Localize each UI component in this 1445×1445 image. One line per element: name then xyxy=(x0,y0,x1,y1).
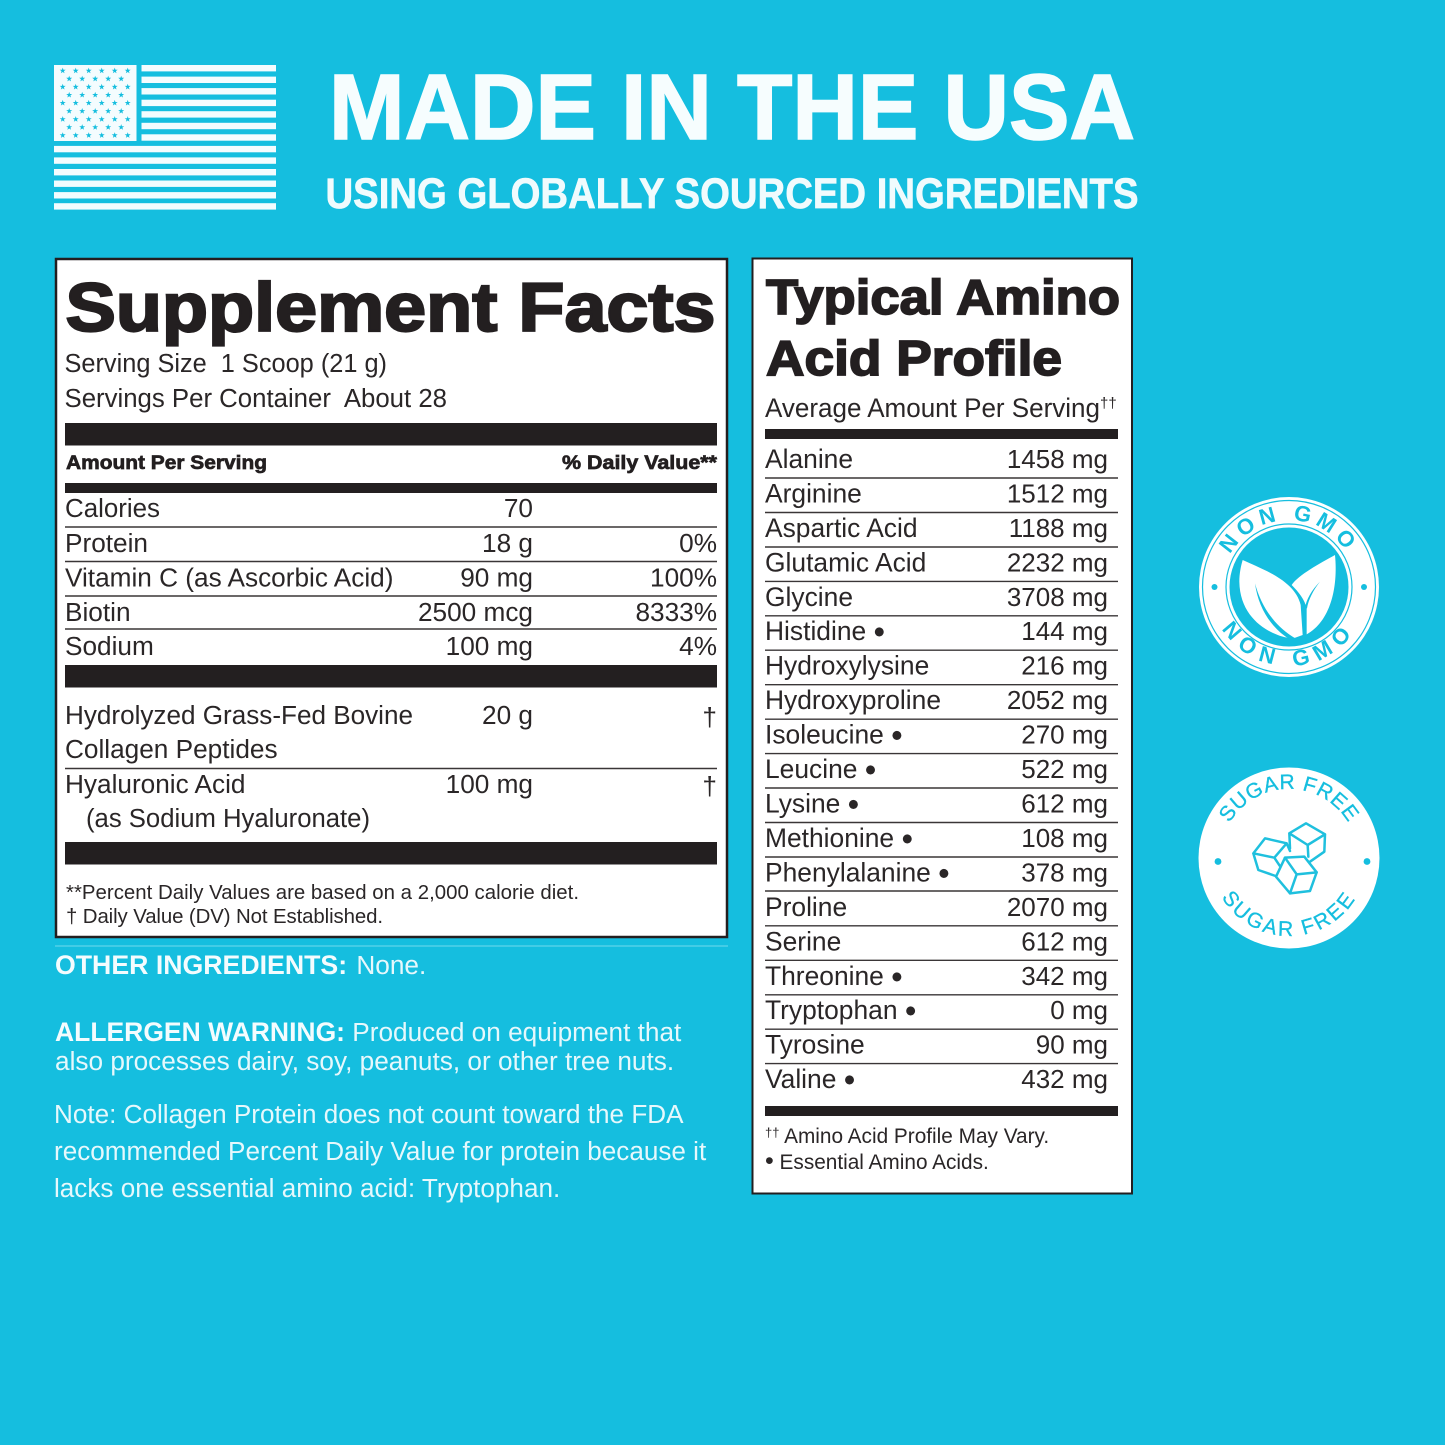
row: hyaluronic acid: 100 mg xyxy=(446,769,533,799)
black bar xyxy=(65,842,717,864)
amino acid rows: • xyxy=(938,854,950,891)
row: hyaluronic acid: (as Sodium Hyaluronate) xyxy=(86,803,370,833)
title: MADE IN THE USA xyxy=(329,55,1135,159)
black bar xyxy=(65,665,717,688)
badge: sugar free xyxy=(1198,768,1380,948)
black bar xyxy=(65,483,717,493)
label: non gmo top: NON GMO xyxy=(1218,506,1354,553)
amino acid rows: Aspartic Acid xyxy=(765,513,918,543)
icon: sugar cubes xyxy=(1253,823,1325,893)
amino acid rows: Valine xyxy=(765,1064,836,1094)
row: hyaluronic acid: † xyxy=(702,771,717,801)
black bar xyxy=(765,1106,1118,1116)
icon: american flag xyxy=(54,65,276,210)
amino acid rows: Threonine xyxy=(765,961,884,991)
black bar xyxy=(65,423,717,446)
row: biotin xyxy=(65,597,717,627)
amino acid rows: 216 mg xyxy=(1021,651,1108,681)
amino acid rows: 378 mg xyxy=(1021,857,1108,887)
amino acid rows: 432 mg xyxy=(1021,1064,1108,1094)
amino acid rows: Hydroxylysine xyxy=(765,651,929,681)
column header: amount per serving: Amount Per Serving xyxy=(66,452,267,474)
text: note: lacks one essential amino acid: Tryptophan. xyxy=(54,1173,560,1203)
row: protein: Protein xyxy=(65,528,148,558)
amino acid rows: Arginine xyxy=(765,478,862,508)
icon: leaves xyxy=(1239,555,1336,639)
amino acid rows: • xyxy=(891,717,903,754)
amino acid rows: 270 mg xyxy=(1021,720,1108,750)
badge: non gmo xyxy=(1199,497,1379,677)
amino acid rows: • xyxy=(874,613,885,650)
footnotes xyxy=(765,1125,1049,1175)
row: protein: 18 g xyxy=(482,528,533,558)
row: collagen peptides: Collagen Peptides xyxy=(65,734,278,764)
amino acid rows: Glycine xyxy=(765,582,853,612)
row: vitamin c: Vitamin C (as Ascorbic Acid) xyxy=(65,562,393,592)
amino acid rows: 612 mg xyxy=(1021,926,1108,956)
heading: typical amino acid profile: Acid Profile xyxy=(766,332,1062,386)
panel: supplement facts xyxy=(56,259,727,937)
amino acid rows: 3708 mg xyxy=(1007,582,1108,612)
label: sugar free top: SUGAR FREE xyxy=(1220,774,1360,822)
subtitle: USING GLOBALLY SOURCED INGREDIENTS xyxy=(326,170,1138,218)
text: note: recommended Percent Daily Value for protein because it xyxy=(54,1136,707,1166)
row: hyaluronic acid xyxy=(65,769,717,833)
row: calories: Calories xyxy=(65,493,160,523)
amino acid rows: Proline xyxy=(765,892,847,922)
row: sodium: 100 mg xyxy=(446,631,533,661)
text: note: Note: Collagen Protein does not count toward the FDA xyxy=(54,1099,684,1129)
text: note xyxy=(54,1099,707,1203)
amino acid rows: • xyxy=(905,992,916,1029)
footnotes: Amino Acid Profile May Vary. xyxy=(779,1125,1049,1148)
column header: daily value: % Daily Value** xyxy=(562,452,717,474)
amino acid rows: Tyrosine xyxy=(765,1030,865,1060)
row: biotin: 8333% xyxy=(635,597,717,627)
row: sodium: Sodium xyxy=(65,631,154,661)
text: allergen warning: ALLERGEN WARNING: Produced on equipment that xyxy=(55,1017,682,1047)
amino acid rows: 90 mg xyxy=(1036,1030,1108,1060)
amino acid rows: • xyxy=(844,1061,855,1098)
heading: supplement facts: Supplement Facts xyxy=(66,269,716,346)
row: sodium xyxy=(65,631,717,661)
subheading: average amount: Average Amount Per Serving xyxy=(765,393,1100,423)
amino acid rows: Leucine xyxy=(765,754,857,784)
row: collagen peptides: † xyxy=(702,702,717,732)
text: allergen warning: also processes dairy, soy, peanuts, or other tree nuts. xyxy=(55,1046,674,1076)
black bar xyxy=(765,429,1118,439)
amino acid rows: • xyxy=(848,786,859,822)
text: allergen warning xyxy=(55,1017,682,1076)
amino acid rows: Serine xyxy=(765,926,841,956)
row: biotin: Biotin xyxy=(65,597,131,627)
label: sugar free bottom: SUGAR FREE xyxy=(1223,891,1355,936)
footnotes xyxy=(66,882,579,928)
subheading: average amount: †† xyxy=(1100,395,1117,412)
amino acid rows: 2052 mg xyxy=(1007,685,1108,715)
amino acid rows: • xyxy=(865,751,876,788)
row: collagen peptides: 20 g xyxy=(482,700,533,730)
amino acid rows: 612 mg xyxy=(1021,788,1108,818)
row: vitamin c: 90 mg xyxy=(460,562,533,592)
amino acid rows: Hydroxyproline xyxy=(765,685,941,715)
amino acid rows: • xyxy=(891,958,903,995)
heading: typical amino acid profile: Typical Amino xyxy=(766,271,1120,325)
serving size: Serving Size 1 Scoop (21 g) xyxy=(64,348,387,378)
footnotes: • Essential Amino Acids. xyxy=(765,1147,989,1175)
row: calories xyxy=(65,493,533,523)
amino acid rows: 1458 mg xyxy=(1007,444,1108,474)
row: biotin: 2500 mcg xyxy=(418,597,533,627)
row: calories: 70 xyxy=(504,493,533,523)
row: sodium: 4% xyxy=(679,631,717,661)
footnotes: † Daily Value (DV) Not Established. xyxy=(66,906,383,928)
amino acid rows xyxy=(765,444,1118,1098)
row: hyaluronic acid: Hyaluronic Acid xyxy=(65,769,246,799)
row: collagen peptides xyxy=(65,700,717,764)
heading: typical amino acid profile xyxy=(766,271,1120,386)
panel: amino acid profile xyxy=(752,258,1132,1194)
amino acid rows: Isoleucine xyxy=(765,720,884,750)
amino acid rows: 0 mg xyxy=(1050,995,1108,1025)
amino acid rows: Phenylalanine xyxy=(765,857,931,887)
amino acid rows: 2232 mg xyxy=(1007,547,1108,577)
amino acid rows: 144 mg xyxy=(1021,616,1108,646)
amino acid rows: Glutamic Acid xyxy=(765,547,926,577)
amino acid rows: 1512 mg xyxy=(1007,478,1108,508)
text: other ingredients: OTHER INGREDIENTS: None. xyxy=(55,950,426,980)
row: protein xyxy=(65,528,717,558)
amino acid rows: 1188 mg xyxy=(1009,513,1108,543)
amino acid rows: 2070 mg xyxy=(1007,892,1108,922)
row: vitamin c xyxy=(65,562,717,592)
amino acid rows: 522 mg xyxy=(1021,754,1108,784)
footnotes: **Percent Daily Values are based on a 2,000 calorie diet. xyxy=(66,882,579,904)
amino acid rows: Methionine xyxy=(765,823,894,853)
amino acid rows: 342 mg xyxy=(1021,961,1108,991)
amino acid rows: Alanine xyxy=(765,444,853,474)
amino acid rows: Histidine xyxy=(765,616,866,646)
row: vitamin c: 100% xyxy=(650,562,717,592)
amino acid rows: • xyxy=(901,820,913,857)
footnotes: †† xyxy=(765,1125,779,1140)
servings per container: Servings Per Container About 28 xyxy=(64,383,447,413)
amino acid rows: 108 mg xyxy=(1021,823,1108,853)
amino acid rows: Tryptophan xyxy=(765,995,898,1025)
label: non gmo bottom: NON GMO xyxy=(1222,620,1349,666)
row: collagen peptides: Hydrolyzed Grass-Fed Bovine xyxy=(65,700,413,730)
row: protein: 0% xyxy=(679,528,717,558)
amino acid rows: Lysine xyxy=(765,788,840,818)
